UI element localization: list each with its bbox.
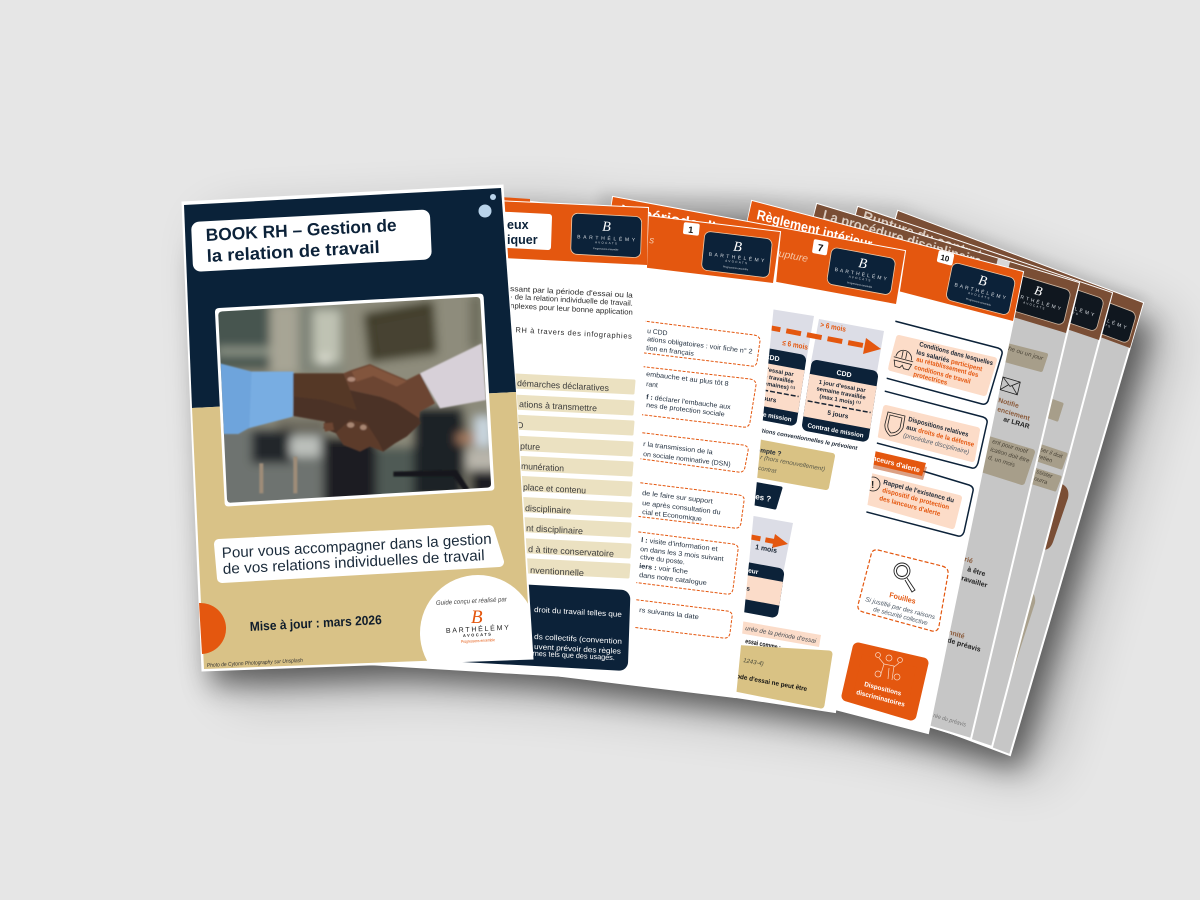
- label: one month: 1 mois: [755, 544, 777, 555]
- contents list labels: place et contenu: [523, 482, 586, 495]
- contents list labels: ations à transmettre: [519, 399, 597, 413]
- card: CDD over 6 months: Contrat de mission: [807, 422, 864, 440]
- card 1 text: Conditions dans lesquelles: [919, 341, 994, 367]
- dashed step 2: embauche et au plus tôt 8: [646, 371, 729, 388]
- sheet C: brown back page: [765, 211, 1143, 755]
- fouilles text: de sécurité collective: [873, 606, 929, 627]
- sheet A: brown back page: [709, 204, 1079, 739]
- card 1 text: les salariés participent: [916, 349, 983, 373]
- sheet 1 logo: Progressons ensemble: [723, 265, 749, 272]
- dashed step 2: rant: [646, 381, 658, 389]
- card 3 text: [879, 479, 955, 518]
- white logo circle: Progressons ensemble: [461, 637, 496, 644]
- sheet B logo: B: [1066, 288, 1077, 304]
- title box: BOOK RH – Gestion de: [205, 215, 397, 245]
- card: CDD up to 6 months: 2 jours: [755, 394, 777, 405]
- subtitle box: [219, 530, 499, 578]
- sheet 7 logo: Progressons ensemble: [847, 281, 873, 289]
- sheet A logo: [1001, 272, 1071, 326]
- arrow: interim duration: [730, 533, 788, 548]
- grey panel: up to 6 months: [733, 304, 814, 362]
- cover page: [182, 185, 536, 691]
- peach note: [733, 620, 821, 647]
- dashed step 2: f : déclarer l'embauche aux: [646, 394, 732, 411]
- card 1 text: au rétablissement des: [916, 356, 979, 379]
- sheet 2 logo: B: [602, 220, 611, 235]
- dashed step 5: l : visite d'information et: [641, 537, 718, 553]
- sheet A logo: B: [1033, 282, 1044, 299]
- sheet 10 logo: [945, 262, 1016, 316]
- sheet A lower text: à être: [967, 566, 986, 578]
- intro paragraph: [510, 284, 634, 341]
- card 2 text: Dispositions relatives: [908, 416, 969, 439]
- tab: lanceurs d'alerte: nceurs d'alerte: [872, 455, 920, 474]
- label: up to 6 months: ≤ 6 mois: [782, 338, 809, 352]
- dashed step 5: dans notre catalogue: [639, 572, 707, 587]
- intro paragraph: : RH à travers des infographies: [510, 325, 632, 341]
- sheet 2 title box: eux: [507, 218, 529, 232]
- dashed step 5: [616, 529, 738, 594]
- dashed step 6: [614, 597, 732, 638]
- sheet A taupe note: he ou un jour: [1008, 346, 1044, 363]
- card: CDD over 6 months: 1 jour d'essai par: [818, 380, 867, 394]
- block label: Dispositions: [864, 681, 902, 698]
- grey panel: interim: [712, 510, 793, 574]
- article reference: 1243-4): [743, 658, 764, 668]
- icon: magnifier: [894, 563, 915, 592]
- sheet 2 header: [338, 194, 648, 265]
- sheet B taupe note 3: ssister: [1035, 469, 1054, 481]
- white logo circle: [420, 575, 531, 661]
- contents list labels: D: [517, 420, 524, 430]
- contents list labels: démarches déclaratives: [517, 378, 610, 393]
- sheet 7 logo: BARTHÉLÉMY: [834, 266, 888, 283]
- sheet A logo: BARTHÉLÉMY: [1009, 290, 1062, 312]
- sheet 7 title: La période d'essai: [620, 201, 755, 242]
- blue sleeve: [220, 362, 281, 435]
- card: CDD over 6 months: [801, 359, 879, 443]
- sheet B: brown back page: [738, 207, 1112, 747]
- navy note: ds collectifs (convention: [534, 632, 622, 646]
- card 2 text: aux droits de la défense: [906, 424, 975, 449]
- block label: discriminatoires: [856, 689, 906, 709]
- photo: handshake: [215, 294, 494, 506]
- card: interim: [712, 557, 785, 618]
- subtitle box: Pour vous accompagner dans la gestion: [221, 531, 492, 562]
- sheet A lower text: nnité: [948, 629, 965, 641]
- sheet A lower text: ravailler: [961, 575, 988, 590]
- page number 10: 10: [940, 253, 951, 264]
- limit statement: ode d'essai ne peut être: [736, 673, 808, 693]
- cover tan band: [192, 392, 531, 669]
- card 3 text: Rappel de l'existence du: [883, 479, 955, 505]
- sheet 7: orange page: [545, 197, 905, 712]
- sheet A lower text: rié: [964, 556, 973, 565]
- dashed step 6: rs suivants la date: [639, 607, 699, 621]
- arrow: dashed duration: [745, 323, 881, 354]
- sheet A notification text: Notifie: [998, 397, 1020, 410]
- icon: helmet: [892, 348, 915, 371]
- outlined card 3: [836, 443, 973, 536]
- sheet C logo: AVOCATS: [1089, 317, 1111, 328]
- navy box: question: [720, 478, 781, 508]
- sheet B taupe note 2: ser il doit: [1039, 447, 1063, 460]
- label: over 6 months: > 6 mois: [820, 320, 847, 334]
- sheet A footnote: rée du préavis: [933, 713, 966, 729]
- peach note: urée de la période d'essai: [745, 625, 817, 645]
- dashed step 1: [620, 318, 760, 366]
- update date: Mise à jour : mars 2026: [249, 612, 382, 634]
- sheet B header: [845, 207, 1112, 340]
- tan box: calcul: Comment le compte ?: [714, 439, 782, 458]
- sheet 10 title: Règlement intérieur: [755, 206, 874, 252]
- right hand: [343, 364, 435, 418]
- dashed panel: fouilles: [858, 550, 948, 631]
- card: interim: ls: [744, 585, 751, 593]
- label: essai comme: essai comme :: [745, 638, 781, 652]
- dashed step 3: [620, 430, 748, 472]
- sheet 2 title box: iquer: [507, 233, 538, 247]
- decorative blue dots: [478, 194, 496, 218]
- sheet 10 logo: Progressons ensemble: [966, 298, 992, 307]
- sheet B taupe note 3: [1020, 466, 1060, 490]
- sheet A lower text: [947, 556, 988, 654]
- card: CDD over 6 months: (max 1 mois) ⁽¹⁾: [819, 393, 862, 408]
- sheet C logo: [1066, 290, 1137, 344]
- sheet A header: [804, 204, 1079, 333]
- peach panel 1: [891, 338, 994, 393]
- drop shadows: [200, 192, 1173, 777]
- tan box: calcul: [714, 436, 832, 487]
- peach panel 3: [868, 476, 959, 526]
- icon: envelope: [1000, 377, 1020, 395]
- sheet A page number: [996, 258, 1010, 270]
- card: CDD over 6 months: CDD: [836, 370, 852, 379]
- sheet 2 logo: AVOCATS: [595, 240, 617, 246]
- sheet 1 logo: [701, 231, 773, 278]
- tan box: calcul: r (hors renouvellement): [760, 455, 825, 473]
- cover navy band: [184, 188, 516, 408]
- sheet B logo: [1033, 278, 1105, 332]
- fouilles label: Fouilles: [889, 590, 917, 606]
- sheet 10 header: [741, 201, 1023, 321]
- tan box: calcul: du contrat: [749, 464, 777, 475]
- sheet A notification text: enciement: [997, 406, 1031, 423]
- sheet 7 logo: [826, 247, 896, 295]
- icon: warning: !: [871, 480, 874, 491]
- sheet C header: [885, 211, 1143, 348]
- fouilles text: Si justifié par des raisons: [865, 596, 936, 621]
- navy box: question: es ?: [755, 492, 772, 504]
- sheet 10 logo: AVOCATS: [968, 291, 990, 300]
- card: CDD up to 6 months: [729, 343, 807, 427]
- contents list labels: d à titre conservatoire: [528, 544, 614, 559]
- sheet B taupe note 1: [1035, 396, 1062, 420]
- sheet B taupe note 2: retien: [1037, 454, 1053, 465]
- dashed step 2: nes de protection sociale: [646, 402, 725, 418]
- card 3 text: des lanceurs d'alerte: [879, 495, 941, 518]
- sheet 1 subtitle: s: [649, 235, 655, 247]
- sheet A title: La procédure disciplinaire: [821, 206, 983, 269]
- sheet B taupe note 2: [1025, 442, 1066, 468]
- sheet A taupe box: [978, 438, 1032, 482]
- fingers: [336, 420, 383, 452]
- page number 7: [812, 239, 829, 256]
- orange half circle: [199, 603, 226, 654]
- sheet 1 logo: AVOCATS: [725, 259, 747, 265]
- sheet B logo: BARTHÉLÉMY: [1042, 294, 1096, 319]
- card: CDD up to 6 months: semaine travaillée: [744, 370, 795, 386]
- sheet 10 logo: B: [977, 273, 989, 290]
- contents list labels: [517, 378, 614, 578]
- intro paragraph: ssant par la période d'essai ou la: [510, 284, 634, 300]
- card 2 text: [903, 416, 975, 456]
- icon: person with balloons: [875, 652, 902, 680]
- sheet B logo: AVOCATS: [1056, 305, 1078, 316]
- sheet A notification text: [997, 397, 1031, 431]
- card 3 text: dispositif de protection: [882, 487, 950, 511]
- sheet 2 logo: BARTHÉLÉMY: [577, 233, 636, 244]
- contents list: [489, 374, 634, 577]
- photo credit: Photo de Cytonn Photography sur Unsplash: [207, 658, 303, 669]
- right shirt sleeve: [420, 343, 486, 408]
- orange sliver behind header: [500, 197, 530, 202]
- sheet 2 logo: [571, 213, 642, 258]
- intro paragraph: nplexes pour leur bonne application: [510, 301, 633, 317]
- card 1 text: conditions de travail: [914, 364, 971, 386]
- tan box: renouvellement: [720, 648, 829, 705]
- subtitle box: de vos relations individuelles de travail: [222, 547, 485, 578]
- white logo circle: B: [471, 607, 483, 628]
- card: interim: eur: [748, 567, 759, 576]
- white logo circle: BARTHÉLÉMY: [446, 623, 509, 635]
- peach panel 2: [880, 408, 977, 459]
- dashed step 3: on sociale nominative (DSN): [643, 451, 731, 469]
- dashed step 1: tion en français: [646, 345, 695, 358]
- sheet A logo: AVOCATS: [1023, 300, 1045, 311]
- card 1 text: [913, 341, 994, 387]
- card 1 text: protectrices: [913, 371, 948, 387]
- white logo circle: AVOCATS: [463, 632, 491, 638]
- sheet C logo: B: [1099, 300, 1110, 317]
- sheet 7 subtitle: rupture: [775, 248, 809, 265]
- sheet B title: Rupture du contrat: [861, 207, 984, 263]
- sheet 7 header: [604, 197, 905, 304]
- outlined card 1: [860, 312, 1002, 404]
- sheet B taupe note 3: ourra: [1033, 476, 1049, 487]
- sheet C brown panel: [1020, 478, 1068, 550]
- title box: la relation de travail: [206, 237, 380, 266]
- navy note: uvent prévoir des règles: [534, 642, 621, 656]
- white logo circle: Guide conçu et réalisé par: [436, 596, 508, 607]
- sheet C taupe sliver: [1000, 590, 1035, 674]
- dashed step 4: ue après consultation du: [642, 500, 721, 516]
- dashed step 1: ations obligatoires : voir fiche n° 2: [647, 335, 753, 356]
- contents list labels: pture: [520, 441, 540, 452]
- orange block: dispositions discriminatoires: [847, 648, 923, 715]
- page number 1: [683, 222, 700, 236]
- dashed step 4: [618, 480, 744, 528]
- sheet A taupe box: d, un mois: [988, 455, 1015, 469]
- contents list labels: munération: [521, 461, 564, 473]
- outlined card 2: [850, 382, 987, 468]
- dashed step 5: ctive du poste.: [640, 554, 685, 566]
- card: CDD over 6 months: 5 jours: [827, 410, 849, 421]
- navy note: [388, 577, 631, 671]
- sheet 1 header: [483, 197, 780, 283]
- dashed step 4: de le faire sur support: [642, 490, 713, 506]
- card: CDD over 6 months: semaine travaillée: [816, 386, 867, 402]
- sheet 1 logo: BARTHÉLÉMY: [708, 251, 765, 264]
- page number 1: 1: [688, 225, 694, 235]
- dashed step 1: u CDD: [647, 328, 668, 337]
- card: CDD up to 6 months: Contrat de mission: [735, 406, 792, 424]
- sheet 7 logo: AVOCATS: [848, 275, 871, 283]
- title box: [191, 209, 432, 272]
- sheet 10 logo: BARTHÉLÉMY: [954, 281, 1007, 302]
- dashed step 4: cial et Economique: [642, 509, 702, 523]
- sheet 1: orange page: [447, 197, 780, 697]
- dashed step 5: iers : voir fiche: [639, 563, 688, 576]
- sheet A taupe box: ent pour motif: [992, 439, 1029, 456]
- grey panel: over 6 months: [811, 319, 884, 378]
- sheet A lower text: de préavis: [947, 637, 981, 654]
- card: CDD up to 6 months: CDD: [764, 354, 780, 363]
- page number 7: 7: [817, 243, 824, 255]
- contents list labels: nventionnelle: [530, 565, 584, 578]
- sheet A taupe box: ication doit être: [990, 447, 1030, 465]
- sheet 2 logo: Progressons ensemble: [593, 247, 619, 252]
- card: CDD up to 6 months: (max 2 semaines) ⁽¹⁾: [741, 376, 796, 393]
- page number 10: [937, 250, 954, 266]
- icon: shield: [885, 412, 905, 436]
- sheet A notification text: ar LRAR: [1003, 416, 1030, 431]
- navy note: ques internes tels que des usages.: [503, 647, 615, 662]
- sheet 1 logo: B: [733, 240, 743, 256]
- sheet 7 logo: B: [857, 256, 868, 273]
- contents list labels: disciplinaire: [525, 503, 571, 516]
- intro paragraph: · de la relation individuelle de travail.: [510, 292, 633, 308]
- left forearm and hand: [293, 373, 421, 452]
- sheet 2: introduction page: [338, 194, 648, 680]
- dashed step 2: [620, 364, 756, 427]
- dashed step 3: r la transmission de la: [643, 441, 713, 456]
- contents list labels: nt disciplinaire: [526, 523, 583, 536]
- sheet 10: orange page: [657, 201, 1023, 733]
- sheet C logo: BARTHÉLÉMY: [1075, 306, 1128, 331]
- navy note: droit du travail telles que: [534, 605, 622, 619]
- card: CDD up to 6 months: 1 jour d'essai par: [746, 364, 795, 378]
- sheet 2 title box: [469, 213, 549, 247]
- footnote: conventions: Sauf si dispositions conventionnelles le prévoient: [721, 421, 859, 452]
- dashed step 5: on dans les 3 mois suivant: [640, 546, 724, 563]
- sheet A taupe note: [990, 342, 1046, 370]
- card 2 text: (procédure disciplinaire): [903, 432, 970, 456]
